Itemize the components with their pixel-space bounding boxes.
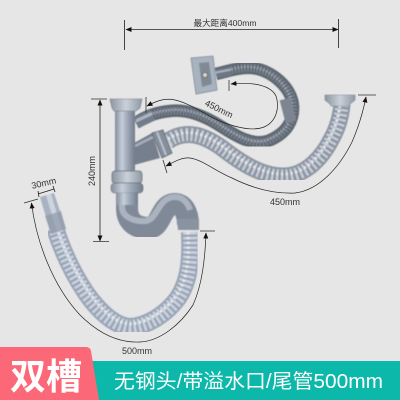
dimension: lower 450mm <box>163 95 376 207</box>
trap inlet highlight <box>116 193 138 205</box>
pink label tab <box>0 347 99 400</box>
nut lower <box>111 183 143 193</box>
trap collar <box>177 219 199 230</box>
main tee and trap assembly <box>110 99 199 230</box>
dimension: upper 450mm: 450mm <box>203 98 235 120</box>
teal feature bar <box>90 361 400 400</box>
dimension: 500mm tail: 500mm <box>122 346 152 356</box>
tee side branch <box>134 133 160 165</box>
top width dimension: 400mm: 最大距离400mm <box>193 17 257 28</box>
overflow hose <box>136 67 293 142</box>
nut upper <box>112 171 142 183</box>
wall bracket overflow plate <box>191 56 217 94</box>
right sink cup <box>325 95 355 106</box>
S-trap bend <box>127 190 188 228</box>
dimension: lower 450mm: 450mm <box>270 197 300 207</box>
top flange <box>110 99 142 111</box>
top width dimension: 400mm <box>124 17 338 50</box>
dimension: 240mm height <box>87 99 109 242</box>
vertical pipe <box>115 106 135 174</box>
dimension: 240mm height: 240mm <box>87 156 97 186</box>
dimension: upper 450mm <box>146 80 278 129</box>
branch slip nut <box>152 130 172 158</box>
tail hose <box>55 228 190 327</box>
tab title: 双槽 <box>10 356 82 397</box>
feature text: 无钢头/带溢水口/尾管500mm <box>114 370 383 393</box>
dimension: 500mm tail <box>24 199 215 356</box>
dimension: 30mm diameter: 30mm <box>31 175 57 191</box>
tail tube end <box>40 193 66 234</box>
long drain hose to right sink cup <box>168 104 342 176</box>
